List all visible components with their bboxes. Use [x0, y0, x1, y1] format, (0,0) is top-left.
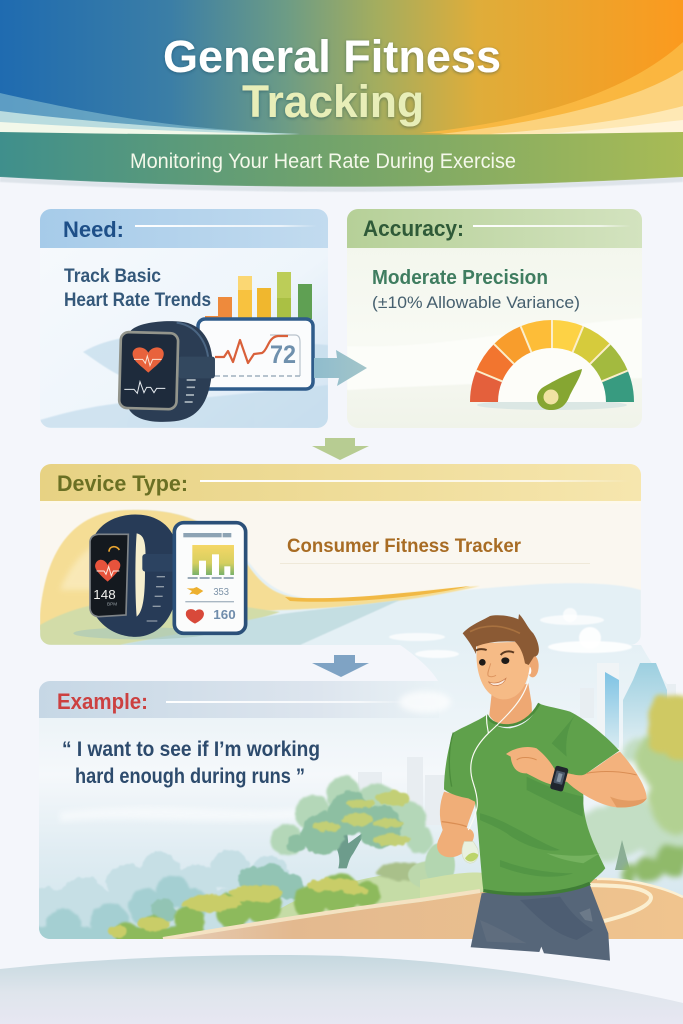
needle: [537, 369, 582, 410]
distant city: [358, 757, 448, 794]
accuracy header bar: [347, 209, 642, 248]
tree: [271, 776, 433, 868]
phone: 353: [213, 587, 229, 598]
icon: smartwatch: [119, 321, 215, 422]
mid hills: [39, 875, 206, 939]
example heading: Example:: [57, 689, 148, 714]
earphone cable: [468, 675, 529, 830]
example quote: [62, 738, 320, 788]
phone: [174, 523, 246, 633]
soft band shadow: [0, 177, 683, 192]
phone: 160: [213, 608, 236, 622]
wristwatch: [550, 765, 569, 792]
need text: Track Basic: [64, 266, 161, 287]
right city buildings: [580, 663, 676, 750]
need text: Heart Rate Trends: [64, 290, 211, 311]
arrow: accuracy to device type: [312, 438, 369, 460]
example sky: [39, 645, 683, 939]
icon: fitness band and phone: [73, 515, 246, 639]
panel: accuracy: (±10% Allowable Variance): [372, 293, 580, 312]
heart rate monitor card: [198, 319, 313, 389]
clouds above the example panel: [389, 608, 632, 658]
neck: [489, 683, 532, 725]
arrow: device type to example: [312, 655, 369, 677]
right trees: [408, 696, 683, 905]
runner illustration: [437, 614, 647, 961]
example quote: hard enough during runs ”: [75, 765, 305, 788]
panel: need: [40, 209, 328, 428]
heart rate value: 72: [270, 341, 296, 369]
subtitle band: [0, 132, 683, 187]
road: [163, 879, 683, 939]
panel: accuracy: [347, 209, 642, 428]
device header bar: [40, 464, 641, 502]
example header bar: [39, 681, 391, 718]
need header bar: [40, 209, 328, 248]
accuracy heading: Accuracy:: [363, 216, 464, 241]
bushes: [115, 873, 380, 947]
icon: fitness band and phone: BPM: [107, 601, 117, 606]
device name: Consumer Fitness Tracker: [287, 536, 522, 557]
back hills: [39, 850, 294, 930]
head: [463, 614, 539, 699]
panel: example: [23, 608, 683, 947]
need heading: Need:: [63, 217, 124, 242]
bottom swoosh: [0, 955, 683, 1024]
ground: [272, 876, 420, 919]
shirt: [444, 703, 619, 894]
left arm: [437, 792, 476, 857]
bar chart: [205, 272, 312, 319]
subtitle: Monitoring Your Heart Rate During Exercise: [130, 150, 516, 173]
music player: [462, 842, 478, 863]
header banner: [0, 0, 683, 192]
device swoosh: [120, 560, 641, 645]
need text: [64, 266, 211, 311]
title line 2: Tracking: [242, 76, 424, 127]
accuracy text: Moderate Precision: [372, 267, 548, 289]
panel: device type: [40, 464, 641, 650]
device heading: Device Type:: [57, 471, 188, 496]
band heart rate: 148: [93, 587, 116, 602]
title line 1: General Fitness: [163, 31, 501, 82]
arrow: need to accuracy: [314, 350, 367, 386]
right arm: [506, 747, 647, 807]
example quote: “ I want to see if I’m working: [62, 738, 320, 761]
landscape: [23, 776, 450, 947]
gauge: [470, 320, 634, 410]
shorts: [471, 883, 610, 961]
